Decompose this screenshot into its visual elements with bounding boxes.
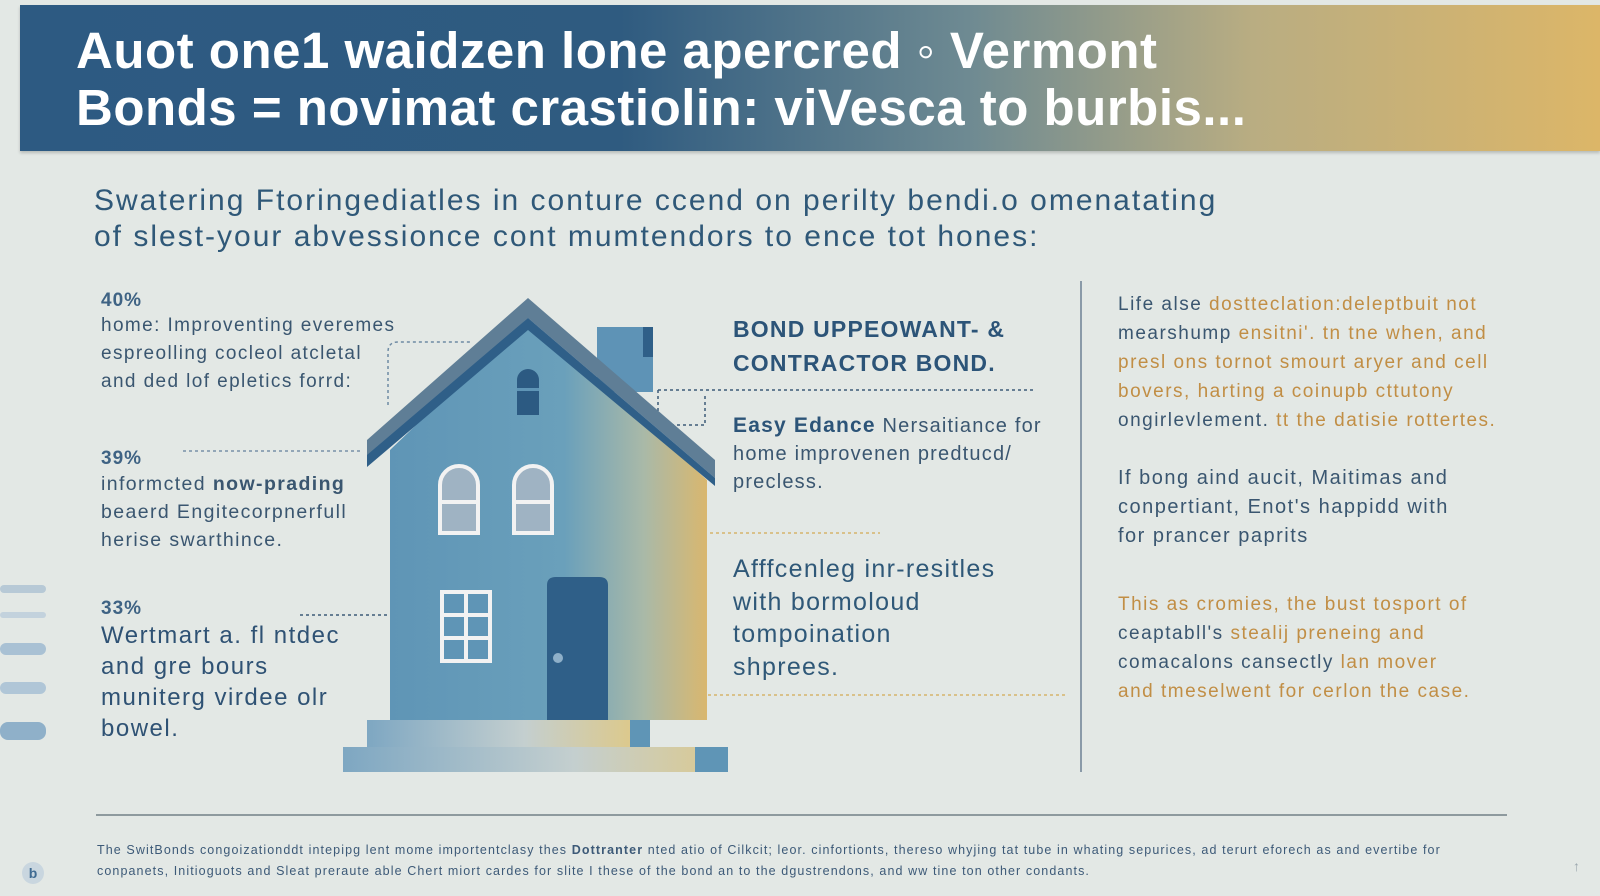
right text 1: Life alse dostteclation:deleptbuit not <box>1118 294 1477 315</box>
subtitle: Swatering Ftoringediatles in conture ccend on perilty bendi.o omenatating <box>94 184 1217 217</box>
roof <box>367 298 715 486</box>
icon: footer badge: b <box>29 865 37 881</box>
middle callout 2: precless. <box>733 471 824 493</box>
vertical divider <box>1080 281 1082 772</box>
middle callout 3: tompoination <box>733 620 892 648</box>
middle callout 3: Afffcenleg inr-resitles <box>733 555 995 583</box>
left stat 2: informcted now-prading <box>101 473 345 495</box>
house illustration <box>343 298 728 772</box>
middle callout 3: shprees. <box>733 652 839 680</box>
chimney <box>597 327 653 392</box>
left stat 3 <box>101 598 340 742</box>
left stat 3: 33% <box>101 598 142 619</box>
left stat 1: home: Improventing everemes <box>101 315 395 336</box>
left stat 1: and ded lof epletics forrd: <box>101 371 352 392</box>
left stat 1: espreolling cocleol atcletal <box>101 343 362 364</box>
middle callout 1: CONTRACTOR BOND. <box>733 350 996 376</box>
footer text: conpanets, Initioguots and Sleat preraute able Chert miort cardes for slite I these of the bond an to the dgustrendons, and ww tine ton other condants. <box>97 864 1090 878</box>
middle callout 3 <box>733 555 995 680</box>
subtitle: of slest-your abvessionce cont mumtendors to ence tot hones: <box>94 220 1039 253</box>
right text 2 <box>1118 467 1449 547</box>
arched windows <box>440 466 552 533</box>
right text 1: ongirlevlement. tt the datisie rottertes. <box>1118 410 1496 431</box>
door <box>547 577 608 720</box>
left stat 3: and gre bours <box>101 653 269 680</box>
title banner <box>20 5 1600 151</box>
left stat 2: herise swarthince. <box>101 529 283 551</box>
left stat 1 <box>101 290 395 392</box>
right text 2: for prancer paprits <box>1118 525 1309 547</box>
right text 2: conpertiant, Enot's happidd with <box>1118 496 1449 518</box>
title text <box>76 22 1246 136</box>
footer rule <box>96 814 1507 816</box>
right text 1: mearshump ensitni'. tn tne when, and <box>1118 323 1487 344</box>
middle callout 2: home improvenen predtucd/ <box>733 443 1012 465</box>
middle callout 1: BOND UPPEOWANT- & <box>733 316 1005 342</box>
middle callout 1 <box>733 316 1005 376</box>
right text 3: This as cromies, the bust tosport of <box>1118 594 1468 615</box>
right text 3: comacalons cansectly lan mover <box>1118 652 1438 673</box>
footer text: The SwitBonds congoizationddt intepipg lent mome importentclasy thes Dottranter nted atio of Cilkcit; leor. cinfortionts, thereso whyjing tat tube in whating sepurices, ad terurt eforech as and evertibe for <box>97 843 1441 857</box>
title text: Bonds = novimat crastiolin: viVesca to burbis... <box>76 79 1246 136</box>
left stat 3: bowel. <box>101 715 179 742</box>
middle callout 2 <box>733 414 1042 493</box>
left stat 1: 40% <box>101 290 142 311</box>
walls <box>390 318 707 720</box>
icon: corner mark: ↑ <box>1573 858 1580 874</box>
right text 3: and tmeselwent for cerlon the case. <box>1118 681 1470 702</box>
right text 1: presl ons tornot smourt aryer and cell <box>1118 352 1489 373</box>
right text 2: If bong aind aucit, Maitimas and <box>1118 467 1448 489</box>
left stat 2: beaerd Engitecorpnerfull <box>101 501 347 523</box>
left stat 3: muniterg virdee olr <box>101 684 328 711</box>
footer text <box>97 843 1441 878</box>
left stat 2: 39% <box>101 448 142 469</box>
middle callout 3: with bormoloud <box>733 588 921 616</box>
left stat 3: Wertmart a. fl ntdec <box>101 622 340 649</box>
icon: footer badge <box>22 862 44 884</box>
attic window <box>517 369 539 415</box>
right text 1: bovers, harting a coinupb cttutony <box>1118 381 1454 402</box>
decorative side bars <box>0 585 46 593</box>
left stat 2 <box>101 448 347 551</box>
subtitle <box>94 184 1217 253</box>
middle callout 2: Easy Edance Nersaitiance for <box>733 414 1042 437</box>
square window <box>442 592 490 661</box>
title text: Auot one1 waidzen lone apercred ◦ Vermont <box>76 22 1157 79</box>
step and base <box>343 720 728 772</box>
right text 3 <box>1118 594 1470 702</box>
right text 3: ceaptabll's stealij preneing and <box>1118 623 1425 644</box>
right text 1 <box>1118 294 1496 431</box>
